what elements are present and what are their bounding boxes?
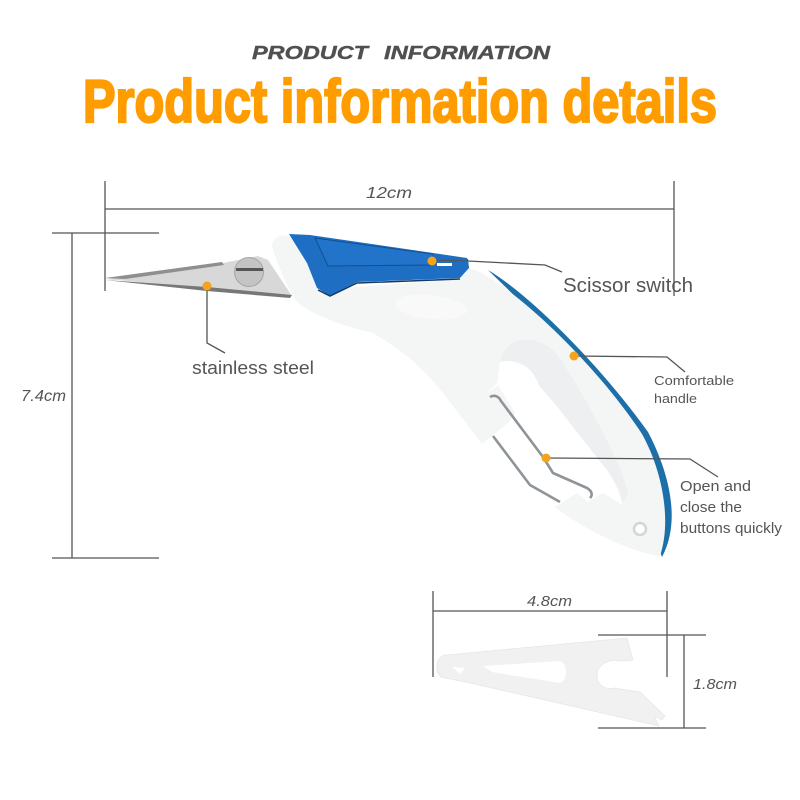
dimension: clip height 1.8cm: 1.8cm [693, 676, 737, 693]
dimension: clip width 4.8cm [433, 591, 667, 677]
dimension: clip height 1.8cm [598, 635, 737, 728]
callout: comfortable handle: handle [654, 391, 697, 406]
handle body [272, 235, 665, 556]
blue switch base [289, 234, 469, 296]
dimension: height 7.4cm [21, 233, 159, 558]
dimension: total length 12cm [105, 181, 674, 296]
dimension: total length 12cm: 12cm [366, 185, 412, 202]
blue outer edge [488, 270, 672, 557]
callout: open and close: close the [680, 499, 742, 516]
subtitle: INFORMATION [384, 43, 551, 63]
subtitle [252, 43, 551, 63]
blade [105, 256, 292, 298]
callout: scissor switch [428, 256, 693, 297]
callout: stainless steel [192, 282, 314, 378]
blue switch button [315, 238, 433, 266]
dimension: clip width 4.8cm: 4.8cm [527, 593, 572, 610]
callout: open and close: buttons quickly [680, 520, 783, 537]
callout: comfortable handle [570, 352, 734, 406]
callout: open and close [542, 454, 783, 537]
lanyard hole [634, 523, 646, 535]
scissors product illustration [105, 234, 672, 557]
callout: comfortable handle: Comfortable [654, 373, 734, 388]
callout: stainless steel: stainless steel [192, 358, 314, 378]
callout: open and close: Open and [680, 478, 751, 495]
wire clip [490, 396, 592, 502]
clip foot [555, 493, 660, 556]
dimension: height 7.4cm: 7.4cm [21, 388, 66, 405]
handle grip oval [394, 291, 468, 323]
handle inner rim shade [500, 340, 628, 503]
white clip accessory [437, 638, 665, 726]
subtitle: PRODUCT [252, 43, 371, 63]
callout: scissor switch: Scissor switch [563, 275, 693, 297]
